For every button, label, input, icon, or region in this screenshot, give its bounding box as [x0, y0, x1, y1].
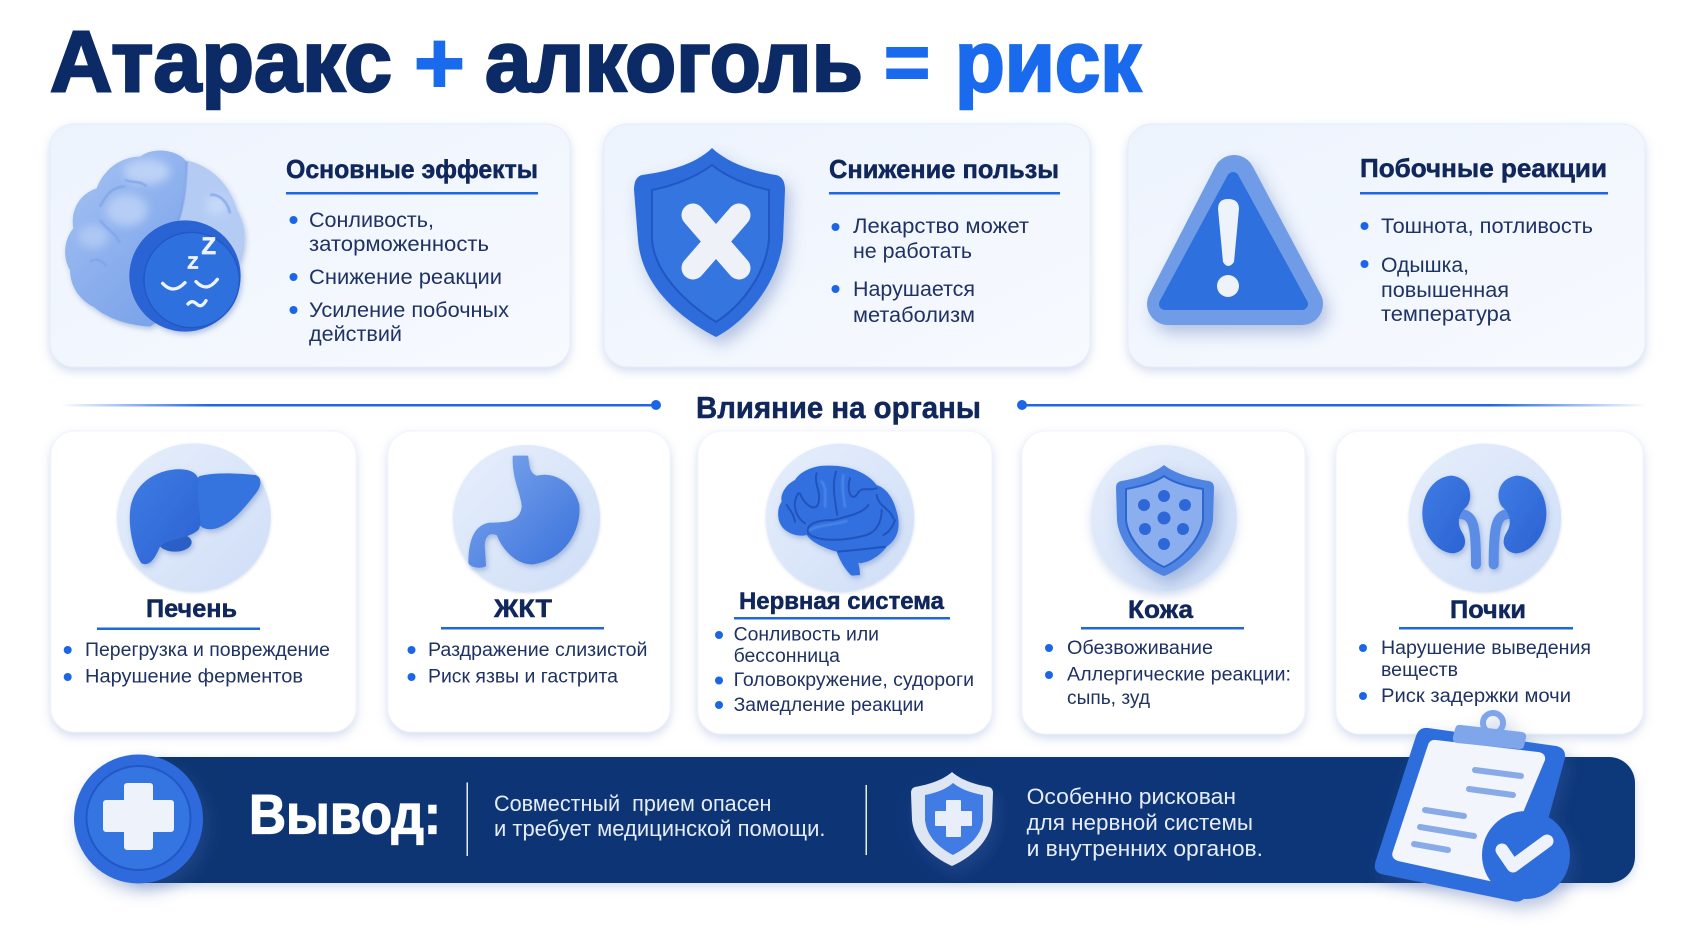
- conclusion text 2: [1027, 784, 1263, 861]
- list: веществ: [1381, 660, 1458, 681]
- list: Снижение реакции: [309, 266, 502, 289]
- list: Риск задержки мочи: [1381, 686, 1571, 707]
- conclusion text 1: [494, 791, 826, 841]
- list: бессонница: [734, 646, 840, 667]
- list: не работать: [853, 240, 972, 263]
- title: Нервная система: [739, 588, 945, 615]
- icon: brain with sleep badge: Z: [201, 233, 216, 260]
- list: заторможенность: [309, 233, 489, 256]
- heading: Основные эффекты: [286, 154, 538, 184]
- icon: medical plus badge: [74, 754, 203, 884]
- list: сыпь, зуд: [1067, 688, 1150, 709]
- section heading: влияние на органы: Влияние на органы: [696, 390, 981, 425]
- panel: побочные реакции: [1128, 124, 1645, 367]
- list: Нарушение ферментов: [85, 666, 303, 688]
- panel: кожа: [1022, 431, 1305, 734]
- icon: liver: [117, 443, 271, 591]
- list: Риск язвы и гастрита: [428, 666, 618, 688]
- title: ЖКТ: [493, 595, 552, 623]
- list: [408, 640, 648, 688]
- title: [50, 14, 1142, 112]
- list: Головокружение, судороги: [734, 670, 974, 691]
- conclusion text 1: Совместный прием опасен: [494, 791, 772, 816]
- title: =: [884, 17, 930, 106]
- icon: brain with sleep badge: [65, 150, 244, 332]
- icon: brain: [766, 444, 914, 592]
- icon: clipboard with check: [1375, 713, 1570, 902]
- section heading: влияние на органы: [60, 390, 1647, 425]
- panel: основные эффекты: [50, 124, 570, 367]
- conclusion text 1: и требует медицинской помощи.: [494, 816, 826, 841]
- conclusion label: Вывод:: [249, 782, 441, 846]
- icon: brain with sleep badge: Z: [187, 253, 198, 273]
- list: [1045, 638, 1291, 709]
- checklist lines: [1414, 770, 1521, 850]
- list: [64, 640, 330, 688]
- icon: skin shield: [1091, 445, 1237, 591]
- panel: жкт: [388, 431, 670, 732]
- title: Атаракс: [50, 14, 392, 110]
- list: Одышка,: [1381, 254, 1469, 277]
- title: риск: [955, 14, 1142, 110]
- list: Усиление побочных: [309, 299, 510, 322]
- list: Перегрузка и повреждение: [85, 640, 330, 661]
- title: +: [414, 15, 465, 112]
- icon: small shield with plus: [911, 772, 993, 866]
- list: Обезвоживание: [1067, 638, 1213, 659]
- list: повышенная: [1381, 279, 1509, 302]
- list: действий: [309, 323, 402, 346]
- list: [832, 215, 1029, 327]
- list: Аллергические реакции:: [1067, 664, 1291, 686]
- list: [1360, 215, 1593, 326]
- list: Замедление реакции: [734, 695, 924, 716]
- panel: снижение пользы: [604, 124, 1090, 367]
- panel: нервная система: [698, 431, 992, 734]
- title: алкоголь: [485, 14, 863, 110]
- heading: Побочные реакции: [1360, 153, 1607, 183]
- list: Лекарство может: [853, 215, 1029, 238]
- title: Печень: [146, 595, 237, 623]
- list: [290, 209, 510, 346]
- conclusion banner: [74, 754, 1635, 884]
- conclusion text 2: для нервной системы: [1027, 810, 1253, 835]
- icon: kidneys: [1409, 444, 1561, 592]
- list: Сонливость или: [734, 624, 879, 646]
- list: Раздражение слизистой: [428, 640, 648, 661]
- conclusion text 2: Особенно рискован: [1027, 784, 1236, 809]
- icon: warning triangle: [1165, 176, 1302, 304]
- title: Почки: [1450, 596, 1526, 624]
- list: Тошнота, потливость: [1381, 215, 1593, 238]
- list: [715, 624, 974, 716]
- list: метаболизм: [853, 304, 975, 327]
- list: Нарушение выведения: [1381, 638, 1591, 659]
- title: Кожа: [1128, 596, 1194, 624]
- heading: Снижение пользы: [829, 154, 1059, 184]
- icon: stomach: [453, 445, 600, 592]
- panel: почки: [1336, 431, 1643, 734]
- conclusion text 2: и внутренних органов.: [1027, 836, 1263, 861]
- list: температура: [1381, 303, 1511, 326]
- list: [1359, 638, 1591, 707]
- panel: печень: [51, 431, 356, 732]
- list: Нарушается: [853, 278, 975, 301]
- list: Сонливость,: [309, 209, 434, 232]
- icon: shield with cross: [634, 148, 785, 337]
